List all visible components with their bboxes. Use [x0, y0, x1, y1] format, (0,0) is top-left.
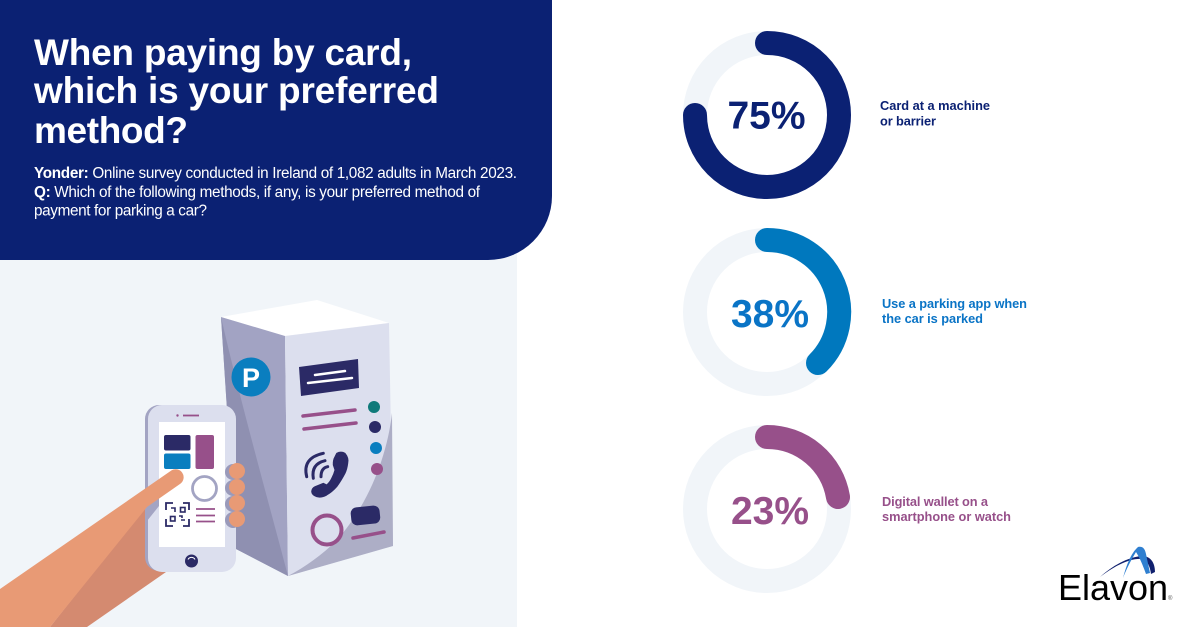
icon: parking P	[232, 358, 270, 396]
app tile purple	[196, 435, 214, 469]
title: which is your preferred	[33, 70, 439, 111]
panel: header	[0, 0, 552, 260]
QR code	[166, 503, 189, 526]
app tile navy	[164, 435, 190, 450]
label: digital wallet: Digital wallet on a	[882, 494, 989, 509]
machine buttons	[368, 401, 383, 475]
gripping fingers	[225, 463, 245, 528]
donut chart: 38%	[695, 240, 839, 384]
survey description: Yonder: Online survey conducted in Ireland of 1,082 adults in March 2023.	[34, 165, 517, 182]
machine text line	[353, 532, 384, 538]
label: card at a machine: Card at a machine	[880, 98, 990, 113]
logo: Elavon	[1058, 547, 1173, 608]
icon: telephone with signal	[306, 452, 348, 497]
palm shadow	[50, 505, 166, 627]
icon: parking P: P	[242, 363, 260, 393]
label: parking app: the car is parked	[882, 311, 983, 326]
app tile blue	[164, 454, 190, 469]
donut chart: 23%	[695, 437, 839, 581]
illustration: parking machine	[221, 300, 393, 576]
illustration: hand and phone	[0, 405, 245, 627]
machine ring	[312, 516, 342, 544]
value: 75%: 75%	[727, 94, 806, 138]
app ring	[192, 476, 216, 500]
label: parking app: Use a parking app when	[882, 296, 1027, 311]
title: method?	[34, 110, 188, 151]
label: digital wallet: smartphone or watch	[882, 509, 1011, 524]
logo: Elavon: ®	[1168, 595, 1173, 602]
logo: Elavon: Elavon	[1058, 567, 1168, 608]
donut chart: 75%	[695, 43, 839, 187]
label: card at a machine: or barrier	[880, 114, 936, 128]
machine text lines	[303, 410, 356, 429]
title: When paying by card,	[34, 32, 412, 73]
phone	[145, 405, 236, 572]
machine card slot	[350, 505, 381, 526]
survey description: Q: Which of the following methods, if any, is your preferred method of	[34, 184, 480, 201]
finger shadow	[147, 497, 159, 521]
value: 23%: 23%	[731, 490, 809, 533]
menu lines	[196, 509, 215, 522]
panel: illustration background	[0, 250, 517, 627]
survey description: payment for parking a car?	[34, 202, 207, 220]
value: 38%: 38%	[731, 293, 809, 336]
hand and pointing finger	[0, 469, 184, 627]
machine display	[299, 359, 359, 396]
